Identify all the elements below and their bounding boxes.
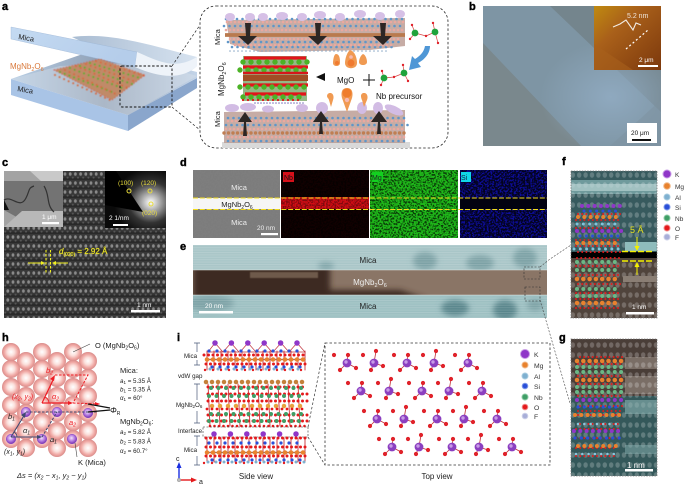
Nb precursor molecule top	[409, 22, 439, 44]
black arrows down	[238, 23, 392, 45]
mica lattice parameters: b	[120, 386, 124, 394]
Si map	[460, 170, 547, 238]
upper mica flap	[11, 27, 197, 76]
lattice labels: 1	[20, 452, 23, 458]
label: phi R: Φ	[110, 406, 117, 415]
connector lines to f and g	[540, 245, 571, 403]
callout O: 2	[125, 346, 128, 352]
MgNb2O6 lattice parameters: a	[120, 429, 124, 436]
lattice labels: , y	[21, 394, 29, 401]
ADF image: O	[244, 200, 250, 209]
MgNb2O6 crystal stack	[240, 56, 309, 103]
d-spacing annotation	[28, 247, 108, 274]
plus sign	[363, 74, 375, 86]
MgNb2O6 unit cell	[42, 375, 100, 405]
label: MgNb2O6: O	[378, 278, 384, 287]
lattice labels: 1	[27, 430, 30, 436]
Nb precursor molecule bottom	[380, 64, 409, 86]
orange droplets lower	[327, 88, 368, 112]
panel h: lattice diagram	[2, 341, 154, 482]
MgNb2O6 lattice parameters: 2	[140, 422, 143, 428]
formula delta s: − y	[69, 471, 83, 480]
legend i: F	[534, 414, 538, 421]
lattice labels: , y	[13, 449, 21, 456]
lattice labels: (x	[4, 449, 10, 456]
scale bar box 20 um	[627, 123, 657, 143]
callout O: O (MgNb	[95, 341, 125, 350]
layer labels: vdW gap	[178, 373, 203, 380]
panel d: EDS maps	[193, 170, 547, 238]
orange droplets upper	[333, 50, 367, 68]
top view caption: Top view	[421, 472, 453, 481]
callout O: 6	[134, 346, 137, 352]
lattice labels: (x	[12, 394, 18, 401]
blue curved arrow	[409, 46, 430, 70]
MgNb2O6 lattice parameters: 6	[149, 422, 152, 428]
MgNb2O6 lattice parameters: O	[143, 417, 149, 426]
5 Å gap annotation: 5 Å	[630, 225, 644, 235]
lattice labels: 2	[17, 396, 21, 402]
overlaid atoms	[574, 357, 622, 456]
label: Mica upper: Mica	[18, 32, 36, 44]
label: MgNb2O6: MgNb	[10, 62, 31, 71]
scale bar 20 nm: 20 nm	[205, 303, 223, 310]
lower mica atoms	[204, 434, 307, 463]
ADF image: 6	[250, 205, 253, 211]
legend i: Al	[534, 374, 541, 381]
scale bar 1 nm	[626, 304, 654, 314]
mica lattice parameters: = 5.35 Å	[126, 386, 152, 394]
label: MgNb2O6 vertical: MgNb	[217, 75, 226, 96]
legend i	[520, 350, 544, 421]
lower mica layer	[222, 100, 410, 148]
ADF image: Mica	[231, 218, 248, 227]
5 Å gap annotation	[622, 225, 652, 275]
mica lattice parameters: 1	[123, 388, 126, 394]
lattice labels: 2	[72, 422, 76, 428]
panel c: HRTEM image	[4, 171, 166, 318]
label: MgNb2O6: 6	[41, 67, 44, 73]
MgNb2O6 lattice parameters: MgNb	[120, 417, 140, 426]
SAED inset: 2 1/nm	[109, 215, 129, 222]
mica lattice parameters: 1	[123, 380, 126, 385]
scale bar 1 nm	[131, 302, 160, 312]
panel f: atomic overlay image	[571, 171, 657, 318]
MgNb2O6 lattice parameters: b	[120, 438, 124, 446]
label: MgO: MgO	[337, 76, 354, 85]
ADF image: 20 nm	[257, 225, 275, 232]
zoom connector lines	[172, 25, 200, 130]
mica unit cell	[11, 412, 97, 439]
legend i: Mg	[534, 363, 544, 370]
MgNb2O6 lattice parameters: :	[151, 417, 154, 426]
layer labels: 2	[193, 404, 196, 409]
mica lattice parameters: = 5.35 Å	[126, 378, 152, 385]
d-spacing annotation: = 2.92 Å	[75, 247, 108, 256]
label: Nb precursor: Nb precursor	[376, 92, 423, 101]
formula delta s: 2	[65, 476, 69, 482]
callout O: O	[128, 341, 134, 350]
layer labels: MgNb	[176, 402, 193, 409]
potassium atoms	[6, 407, 93, 444]
legend i: Si	[534, 384, 541, 391]
atoms row 1	[332, 349, 479, 372]
black arrows up	[238, 111, 387, 136]
mica lattice parameters: = 60°	[126, 395, 143, 402]
mica lattice parameters: α	[120, 395, 124, 402]
MgNb2O6 lattice parameters: = 5.83 Å	[126, 438, 152, 446]
panel label e: e	[180, 241, 186, 253]
panel label i: i	[177, 332, 180, 344]
MgNb2O6 lattice parameters	[120, 417, 154, 455]
label: 5.2 nm: 5.2 nm	[627, 13, 649, 20]
atoms row 3	[362, 405, 508, 428]
label: MgNb2O6: MgNb	[353, 278, 374, 287]
lattice labels: a	[50, 435, 54, 444]
upper mica layer	[224, 10, 405, 52]
legend f	[663, 170, 684, 242]
layer labels: Mica	[184, 447, 198, 454]
axes: c	[176, 456, 180, 463]
Mg map: Mg	[372, 175, 382, 182]
legend i: Nb	[534, 395, 543, 402]
formula delta s: Δs = (x	[17, 471, 41, 480]
lattice labels: α	[23, 426, 27, 435]
TEM inset: 1 μm	[42, 214, 57, 221]
Mg map	[370, 170, 458, 238]
scale bar 20 nm	[199, 303, 233, 314]
panel e: cross-section TEM	[186, 245, 547, 320]
ADF image: Mica	[231, 183, 248, 192]
mica lattice parameters: Mica:	[120, 366, 138, 375]
rotation angle marker	[88, 404, 110, 412]
mica lattice parameters: 1	[124, 397, 127, 402]
scale bar 1 nm: 1 nm	[632, 304, 646, 311]
label: Mica top: Mica	[213, 28, 222, 45]
scale bar 1 nm: 1 nm	[137, 302, 151, 309]
MgNb2O6 lattice parameters: α	[120, 448, 124, 455]
layer labels: Interface	[178, 428, 203, 435]
d-spacing annotation: d	[59, 247, 64, 256]
panel a: mica slabs schematic	[10, 27, 197, 131]
formula delta s: , y	[58, 471, 68, 480]
lattice labels: )	[22, 449, 25, 456]
callout K	[75, 443, 106, 467]
lattice labels: α	[52, 392, 56, 401]
dashed yellow interface lines	[193, 198, 547, 210]
legend f: Al	[675, 195, 681, 202]
SAED inset: (120)	[141, 180, 156, 187]
lattice labels: 1	[12, 416, 15, 422]
zoom boxes	[524, 267, 540, 301]
connector lines to top view	[308, 343, 325, 465]
MgNb2O6 crystal film	[54, 59, 145, 100]
label: MgNb2O6: O	[34, 62, 41, 71]
legend f: K	[675, 172, 680, 179]
legend i: K	[534, 352, 539, 359]
panel label b: b	[469, 1, 476, 13]
TEM inset	[4, 171, 63, 227]
atoms row 4	[377, 433, 523, 456]
label: Mica lower: Mica	[17, 84, 35, 96]
Si map: Si	[461, 175, 468, 182]
inset frame	[200, 6, 448, 148]
layer labels: O	[195, 402, 200, 409]
height profile	[613, 20, 641, 30]
panel b: optical micrograph	[483, 6, 661, 146]
interface box	[203, 427, 308, 437]
lattice labels: )	[30, 394, 33, 401]
mica lattice parameters: a	[120, 378, 124, 385]
panel label d: d	[180, 157, 187, 169]
panel label f: f	[562, 156, 566, 168]
label: MgNb2O6: 6	[384, 283, 387, 289]
legend f: Nb	[675, 216, 684, 223]
formula delta s: )	[83, 471, 87, 480]
panel label a: a	[2, 1, 9, 13]
formula delta s: 2	[40, 476, 44, 482]
label: MgNb2O6 vertical: 2	[222, 72, 228, 75]
panel g: atomic overlay image	[571, 339, 657, 476]
scale bar 1 nm: 1 nm	[627, 461, 645, 470]
panel label c: c	[2, 157, 8, 169]
AFM inset	[594, 6, 661, 70]
label: Mica bottom: Mica	[360, 302, 377, 311]
panel label g: g	[559, 332, 566, 344]
lattice labels: 2	[55, 396, 59, 402]
callout K: K (Mica)	[78, 458, 106, 467]
panel a inset: growth mechanism	[200, 6, 448, 148]
MgNb2O6 lattice parameters: 2	[124, 450, 127, 455]
MgNb2O6 lattice parameters: 2	[123, 431, 126, 436]
label: phi R: R	[117, 411, 121, 417]
ADF image	[193, 170, 280, 238]
lattice labels: b	[46, 366, 50, 375]
legend f: O	[675, 226, 680, 233]
SAED inset	[105, 171, 166, 228]
formula delta s: 1	[56, 476, 59, 482]
layer labels: Mica	[184, 353, 198, 360]
axes	[176, 456, 203, 484]
SAED inset: (020)	[142, 210, 157, 217]
scan line	[626, 30, 648, 49]
Nb map	[281, 170, 369, 238]
MgNb2O6 atoms	[206, 382, 308, 426]
ADF image: MgNb	[221, 200, 241, 209]
panel i: side view structure	[176, 343, 308, 484]
overlaid atoms	[574, 206, 622, 308]
layer labels: 6	[200, 404, 203, 409]
MgNb2O6 lattice parameters: = 60.7°	[126, 448, 148, 455]
lattice labels	[4, 366, 76, 458]
lattice labels: 2	[49, 370, 53, 376]
atoms row 2	[346, 377, 493, 400]
d-spacing annotation: (020)	[63, 252, 75, 258]
panel i: top view frame	[325, 343, 550, 465]
label: MgNb2O6 vertical: O	[217, 65, 226, 72]
ADF image: 2	[241, 205, 244, 211]
lattice labels: 1	[10, 452, 13, 458]
lattice labels: a	[69, 418, 73, 427]
label: Mica bottom: Mica	[213, 110, 222, 127]
MgNb2O6 lattice parameters: = 5.82 Å	[126, 429, 152, 436]
AFM scale bar: 2 μm	[639, 57, 654, 64]
dimension brackets	[194, 343, 200, 465]
label: MgNb2O6: 2	[374, 283, 378, 289]
lattice labels: 2	[27, 396, 31, 402]
legend i: O	[534, 405, 539, 412]
callout O	[73, 341, 140, 352]
lattice labels: b	[8, 412, 12, 421]
label: MgNb2O6: 2	[31, 67, 34, 73]
scale bar box 20 um: 20 μm	[631, 130, 649, 137]
oxygen atoms lattice	[2, 343, 97, 457]
SAED inset: (100)	[118, 180, 133, 187]
formula delta s: − x	[43, 471, 56, 480]
legend f: Mg	[675, 184, 684, 191]
MgNb2O6 lattice parameters: 2	[123, 440, 126, 446]
upper mica atoms	[204, 343, 307, 370]
zoom box	[120, 66, 172, 107]
lower mica slab	[11, 48, 197, 131]
black triangle arrow	[316, 73, 325, 81]
layer labels	[176, 353, 203, 454]
label: MgNb2O6 vertical: 6	[222, 62, 228, 65]
label: Mica top: Mica	[360, 256, 377, 265]
side view caption: Side view	[239, 472, 273, 481]
mica lattice parameters	[120, 366, 152, 402]
legend f: F	[675, 235, 679, 242]
legend f: Si	[675, 205, 681, 212]
Nb map: Nb	[284, 175, 293, 182]
panel label h: h	[2, 332, 9, 344]
lattice labels: 1	[54, 440, 57, 446]
callout O: )	[137, 341, 140, 350]
formula delta s: 1	[81, 476, 84, 482]
